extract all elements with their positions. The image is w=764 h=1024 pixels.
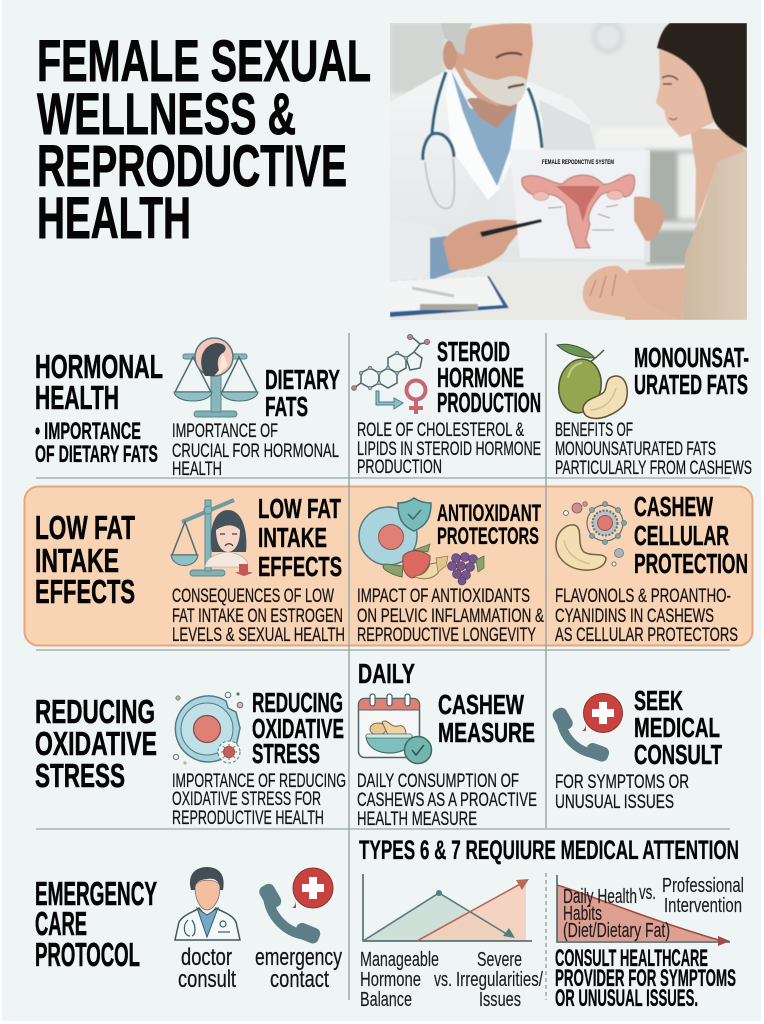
icon: cell under oxidative stress: [173, 692, 243, 765]
text: steroid description: PRODUCTION: [357, 456, 442, 478]
heading: low fat intake effects: EFFECTS: [35, 573, 135, 610]
text: daily consumption description: HEALTH MEASURE: [357, 808, 477, 830]
labels: chart one: [360, 949, 543, 1011]
heading: hormonal health: HEALTH: [35, 379, 119, 416]
anatomy chart paper: [515, 192, 644, 259]
text: oxidative stress description: REPRODUCTIVE HEALTH: [172, 807, 324, 829]
title: FEMALE SEXUAL: [37, 29, 371, 94]
heading: reducing oxidative stress sub: STRESS: [252, 738, 320, 769]
woman: neck: [690, 128, 745, 225]
labels: chart one: Balance: [360, 989, 412, 1011]
icon: olive and cashew: [555, 344, 627, 418]
text: dietary fats description: HEALTH: [172, 458, 222, 480]
title: [37, 29, 371, 251]
heading: low fat intake effects sub: INTAKE: [258, 522, 327, 553]
labels: chart one: vs.: [434, 969, 452, 991]
labels: doctor consult and emergency contact: [178, 944, 342, 993]
text: daily consumption description: DAILY CONSUMPTION OF: [357, 770, 519, 792]
woman: arm and hands: [625, 268, 687, 320]
labels: chart one: Issues: [479, 989, 521, 1011]
labels: chart one: Hormone: [360, 969, 421, 991]
title: REPRODUCTIVE: [37, 134, 347, 199]
labels: chart two: Habits: [563, 903, 602, 925]
woman: hair: [657, 23, 747, 148]
column divider lines: [349, 333, 546, 1000]
heading: reducing oxidative stress sub: REDUCING: [252, 687, 343, 718]
heading: steroid hormone production: STEROID: [437, 336, 510, 367]
heading: steroid hormone production: PRODUCTION: [437, 387, 541, 418]
text: oxidative stress description: IMPORTANCE OF REDUCING: [172, 770, 346, 792]
panel: low fat intake highlight band: [24, 486, 752, 646]
text: antioxidants description: REPRODUCTIVE LONGEVITY: [357, 624, 536, 646]
heading: antioxidant protectors: [437, 500, 541, 550]
labels: chart two: vs.: [639, 882, 656, 904]
icon: cashew with cellular molecule: [556, 501, 627, 570]
heading: reducing oxidative stress: REDUCING: [35, 693, 155, 730]
panel: hormonal health row: [35, 334, 752, 480]
icon: steroid molecule and venus symbol: [352, 334, 430, 414]
text: low fat description: CONSEQUENCES OF LOW: [172, 585, 334, 607]
text: monounsaturated description: [555, 419, 752, 479]
labels: chart two: Daily Health: [563, 886, 637, 908]
heading: cashew measure: [438, 689, 535, 748]
text: dietary fats description: CRUCIAL FOR HORMONAL: [172, 440, 339, 462]
heading: reducing oxidative stress: OXIDATIVE: [35, 725, 157, 762]
heading: low fat intake effects sub: [258, 493, 342, 582]
text: cashew protection description: [555, 585, 738, 646]
text: antioxidants description: ON PELVIC INFLAMMATION &: [357, 605, 544, 627]
heading: antioxidant protectors: ANTIOXIDANT: [437, 500, 541, 527]
heading: low fat intake effects: LOW FAT: [35, 509, 135, 546]
text: antioxidants description: [357, 585, 544, 646]
text: daily consumption description: CASHEWS AS A PROACTIVE: [357, 789, 537, 811]
heading: steroid hormone production: [437, 336, 541, 418]
stethoscope: [423, 72, 542, 160]
labels: chart two: (Diet/Dietary Fat): [563, 920, 670, 942]
heading: antioxidant protectors: PROTECTORS: [437, 523, 539, 550]
labels: doctor consult and emergency contact: doctor: [181, 944, 232, 971]
heading: steroid hormone production: HORMONE: [437, 362, 524, 393]
heading: emergency care protocol: EMERGENCY: [35, 875, 157, 912]
heading: reducing oxidative stress sub: OXIDATIVE: [252, 713, 344, 744]
heading: cashew measure: MEASURE: [438, 717, 535, 748]
text: low fat description: FAT INTAKE ON ESTROGEN: [172, 605, 343, 627]
text: low fat description: LEVELS & SEXUAL HEALTH: [172, 624, 345, 646]
icon: antioxidant cell, shield and fruit: [359, 498, 484, 585]
text: antioxidants description: IMPACT OF ANTIOXIDANTS: [357, 585, 530, 607]
heading: emergency care protocol: [35, 875, 157, 973]
panel: reducing oxidative stress row: [35, 658, 722, 830]
blue shirt: [451, 70, 517, 186]
chart: daily habits versus professional intervention: [557, 875, 730, 946]
heading: dietary fats: DIETARY: [265, 364, 340, 395]
icon: calendar with cashew bowl: [358, 694, 432, 764]
heading: hormonal health: HORMONAL: [35, 348, 163, 385]
text: dietary fats description: IMPORTANCE OF: [172, 420, 278, 442]
text: oxidative stress description: OXIDATIVE STRESS FOR: [172, 788, 321, 810]
text: seek consult description: UNUSUAL ISSUES: [555, 791, 674, 813]
heading: emergency care protocol: PROTOCOL: [35, 936, 140, 973]
text: dietary fats description: [172, 420, 339, 480]
title: HEALTH: [37, 186, 191, 251]
doctor head: [452, 23, 533, 106]
icon: doctor: [175, 867, 240, 940]
heading: monounsaturated fats: [634, 342, 749, 400]
panel: low fat intake row: [35, 491, 748, 646]
labels: doctor consult and emergency contact: consult: [178, 966, 236, 993]
heading: emergency care protocol: CARE: [35, 905, 87, 942]
text: steroid description: ROLE OF CHOLESTEROL &: [357, 419, 524, 441]
chart title on paper: FEMALE REPODNCTIVE SYSTEM: [542, 160, 614, 166]
text: daily consumption description: [357, 770, 537, 830]
title: WELLNESS &: [37, 82, 296, 147]
heading: cashew cellular protection: [634, 491, 748, 579]
text: low fat description: [172, 585, 345, 646]
woman: face: [656, 48, 714, 137]
labels: chart one: Severe: [477, 949, 522, 971]
heading: dietary fats: FATS: [265, 391, 308, 422]
icon: phone with medical speech bubble: [550, 694, 622, 763]
heading: seek medical consult: CONSULT: [634, 739, 722, 770]
panel: emergency care protocol row: [35, 835, 744, 1012]
heading: reducing oxidative stress: [35, 693, 157, 794]
labels: chart one: Manageable: [360, 949, 439, 971]
row divider lines: [36, 478, 730, 829]
woman: cardigan: [682, 150, 747, 320]
heading: low fat intake effects sub: EFFECTS: [258, 551, 342, 582]
photo: doctor explaining reproductive system diagram to patient: [390, 21, 747, 320]
lapels: [446, 68, 500, 200]
text: importance of dietary fats: OF DIETARY FATS: [35, 441, 158, 468]
callout: consult healthcare provider: [555, 945, 736, 1012]
text: monounsaturated description: BENEFITS OF: [555, 419, 633, 441]
clipboard: [390, 276, 509, 317]
heading: low fat intake effects: INTAKE: [35, 542, 119, 579]
table: [390, 265, 684, 318]
doctor right fingers on paper: [634, 197, 664, 241]
text: steroid description: [357, 419, 541, 478]
chart: manageable balance versus severe irregularities: [363, 874, 532, 941]
icon: balance scale with woman: [174, 338, 258, 417]
labels: doctor consult and emergency contact: contact: [270, 966, 329, 993]
heading: reducing oxidative stress: STRESS: [35, 757, 125, 794]
text: seek consult description: FOR SYMPTOMS OR: [555, 771, 689, 793]
text: importance of dietary fats: [35, 418, 158, 468]
heading: daily: DAILY: [358, 658, 415, 689]
heading: low fat intake effects sub: LOW FAT: [258, 493, 341, 524]
heading: seek medical consult: MEDICAL: [634, 712, 720, 743]
heading: cashew measure: CASHEW: [438, 689, 524, 720]
doctor cuff and hand: [430, 236, 460, 280]
icon: emergency phone: [257, 868, 333, 945]
heading: seek medical consult: [634, 685, 722, 770]
text: seek consult description: [555, 771, 689, 813]
icon: tilted scale and sad woman: [171, 500, 253, 576]
labels: chart one: Irregularities/: [456, 969, 543, 991]
heading: cashew cellular protection: CASHEW: [634, 491, 713, 522]
heading: seek medical consult: SEEK: [634, 685, 683, 716]
text: oxidative stress description: [172, 770, 346, 829]
heading: low fat intake effects: [35, 509, 135, 610]
heading: dietary fats: [265, 364, 340, 422]
text: importance of dietary fats: • IMPORTANCE: [35, 418, 141, 445]
text: steroid description: LIPIDS IN STEROID HORMONE: [357, 438, 541, 460]
heading: hormonal health: [35, 348, 163, 416]
labels: chart two: [563, 875, 744, 942]
white coat: [390, 70, 650, 262]
labels: doctor consult and emergency contact: emergency: [255, 944, 342, 971]
heading: reducing oxidative stress sub: [252, 687, 344, 769]
